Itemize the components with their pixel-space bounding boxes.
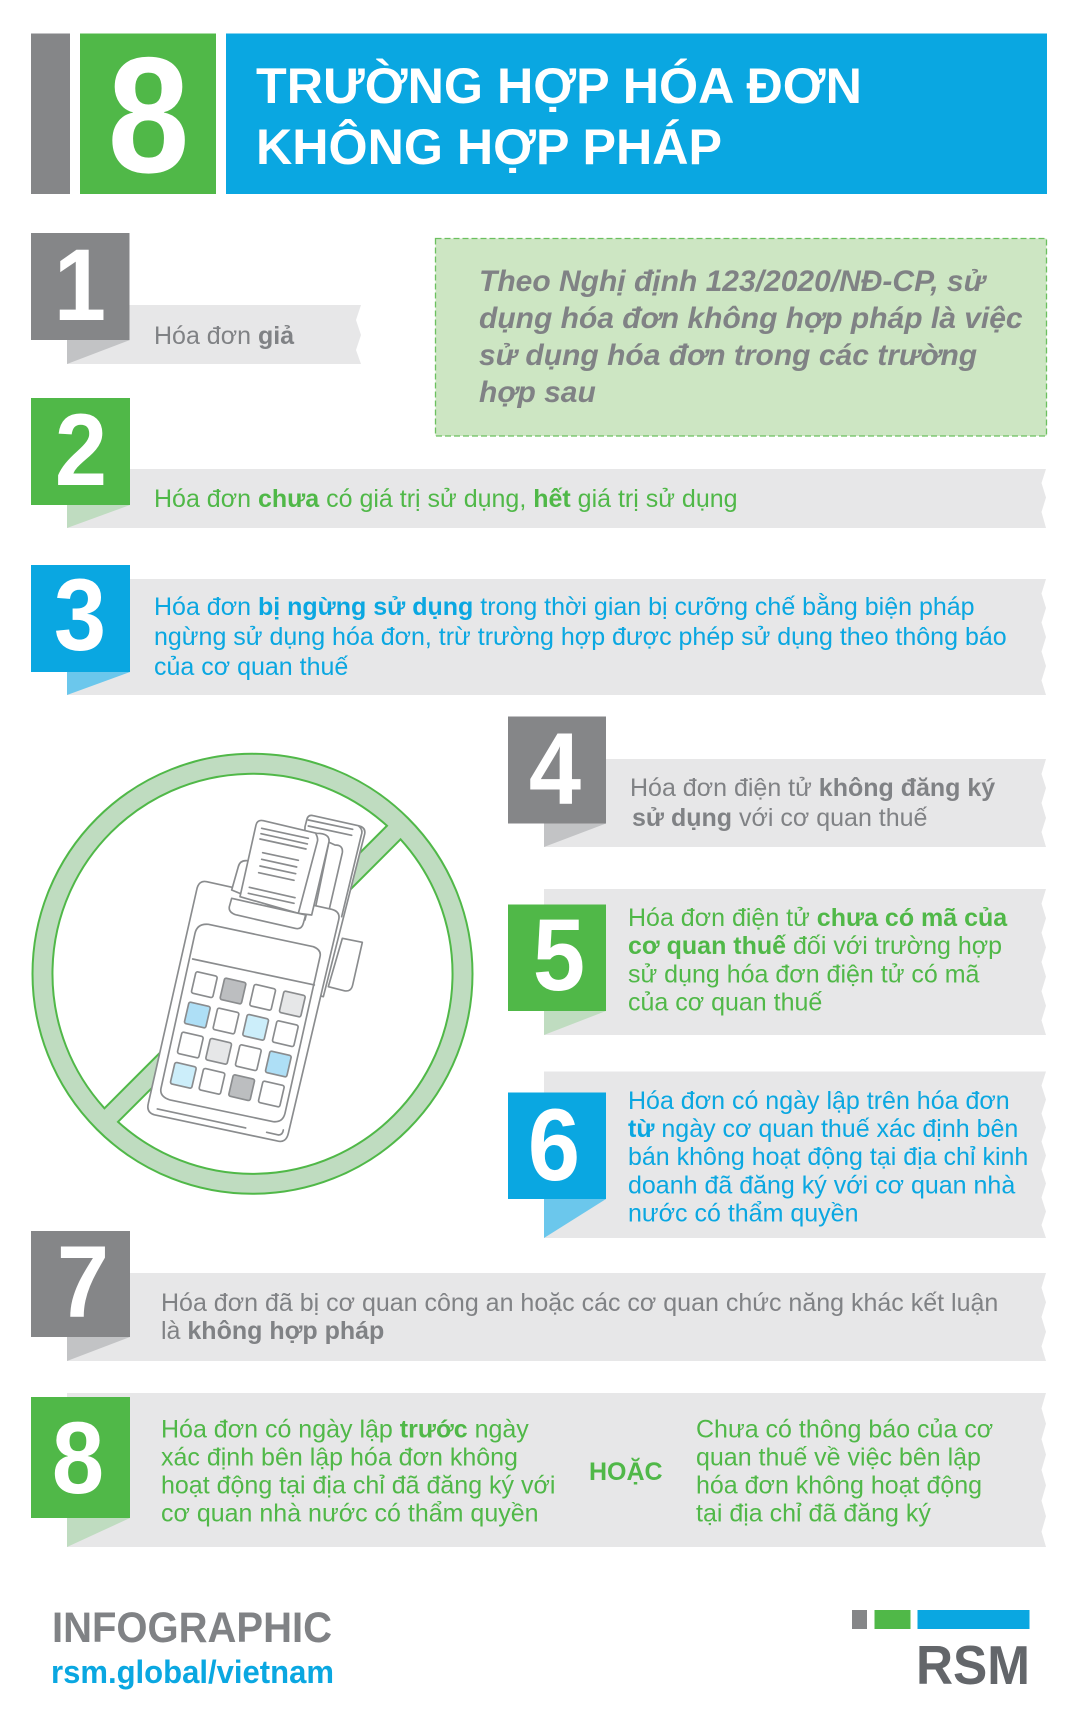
item 6 (508, 1072, 1046, 1238)
item 1: Hóa đơn giả (154, 322, 295, 350)
item 5: đối với trường hợp (786, 932, 1002, 960)
condition A: xác định bên lập hóa đơn không (161, 1444, 518, 1472)
item 4: 4 (529, 711, 581, 826)
item 1: 1 (54, 227, 106, 342)
footer label (51, 1604, 334, 1690)
title (226, 34, 1047, 194)
item 7: không hợp pháp (187, 1317, 384, 1345)
item 8: 8 (52, 1400, 104, 1515)
condition B: hóa đơn không hoạt động (696, 1472, 982, 1500)
title: KHÔNG HỢP PHÁP (256, 118, 722, 175)
header (31, 24, 1047, 208)
item 5: của cơ quan thuế (628, 988, 822, 1016)
item 6: 6 (528, 1087, 580, 1202)
icon: POS machine (148, 815, 365, 1141)
item 3: ngừng sử dụng hóa đơn, trừ trường hợp được phép sử dụng theo thông báo (154, 623, 1007, 651)
footer label: INFOGRAPHIC (52, 1604, 332, 1652)
callout: decree note: Theo Nghị định 123/2020/NĐ-CP, sử (479, 265, 988, 298)
item 4: Hóa đơn điện tử (630, 774, 819, 802)
header gray bar (31, 34, 70, 194)
condition A: trước ngày (400, 1416, 529, 1444)
item 6: từ (628, 1115, 655, 1143)
item 3: của cơ quan thuế (154, 653, 348, 681)
item 6: nước có thẩm quyền (628, 1200, 858, 1228)
item 5: chưa có mã của (817, 904, 1008, 932)
item 6: ngày cơ quan thuế xác định bên (654, 1115, 1018, 1143)
item 4: sử dụng (632, 804, 732, 832)
item 7: 7 (57, 1224, 109, 1339)
item 3: Hóa đơn (154, 593, 258, 621)
item 5: Hóa đơn điện tử (628, 904, 817, 932)
item 8 (31, 1393, 1046, 1547)
item 3: 3 (54, 557, 106, 672)
item 7: Hóa đơn đã bị cơ quan công an hoặc các cơ quan chức năng khác kết luận (161, 1289, 998, 1317)
condition A: hoạt động tại địa chỉ đã đăng ký với (161, 1472, 555, 1500)
item 7: là (161, 1317, 187, 1345)
RSM logo: RSM (916, 1634, 1030, 1696)
item 5: sử dụng hóa đơn điện tử có mã (628, 960, 980, 988)
item 2 (31, 392, 1046, 528)
item 2: Hóa đơn chưa có giá trị sử dụng, hết giá trị sử dụng (154, 485, 738, 513)
condition A: cơ quan nhà nước có thẩm quyền (161, 1500, 539, 1528)
item 4: với cơ quan thuế (732, 804, 928, 832)
callout: decree note: hợp sau (479, 376, 596, 409)
condition B: quan thuế về việc bên lập (696, 1444, 981, 1472)
item 3 (31, 557, 1046, 695)
item 6: doanh đã đăng ký với cơ quan nhà (628, 1172, 1015, 1200)
item 4: không đăng ký (819, 774, 995, 802)
item 5 (508, 889, 1046, 1035)
callout: decree note (436, 238, 1046, 436)
item 6: Hóa đơn có ngày lập trên hóa đơn (628, 1087, 1010, 1115)
item 5: cơ quan thuế (628, 932, 786, 960)
item 1 (31, 227, 361, 364)
condition B: tại địa chỉ đã đăng ký (696, 1500, 931, 1528)
condition B: Chưa có thông báo của cơ (696, 1416, 993, 1444)
item 5: 5 (533, 897, 585, 1012)
illustration: prohibited POS invoice machine (32, 754, 472, 1194)
header number block (80, 24, 216, 208)
item 2: 2 (55, 392, 107, 507)
or label: HOẶC (589, 1457, 663, 1486)
callout: decree note: sử dụng hóa đơn trong các trường (479, 339, 977, 372)
item 7 (31, 1224, 1046, 1361)
callout: decree note: dụng hóa đơn không hợp pháp là việc (479, 302, 1023, 335)
item 6: bán không hoạt động tại địa chỉ kinh (628, 1143, 1028, 1171)
prohibition sign (32, 754, 472, 1194)
footer label: rsm.global/vietnam (51, 1654, 334, 1690)
item 3: bị ngừng sử dụng trong thời gian bị cưỡng chế bằng biện pháp (258, 593, 975, 621)
item 4 (508, 711, 1046, 847)
header number block: 8 (108, 24, 189, 208)
RSM logo (852, 1610, 1030, 1696)
condition A: Hóa đơn có ngày lập (161, 1416, 400, 1444)
title: TRƯỜNG HỢP HÓA ĐƠN (256, 58, 862, 114)
